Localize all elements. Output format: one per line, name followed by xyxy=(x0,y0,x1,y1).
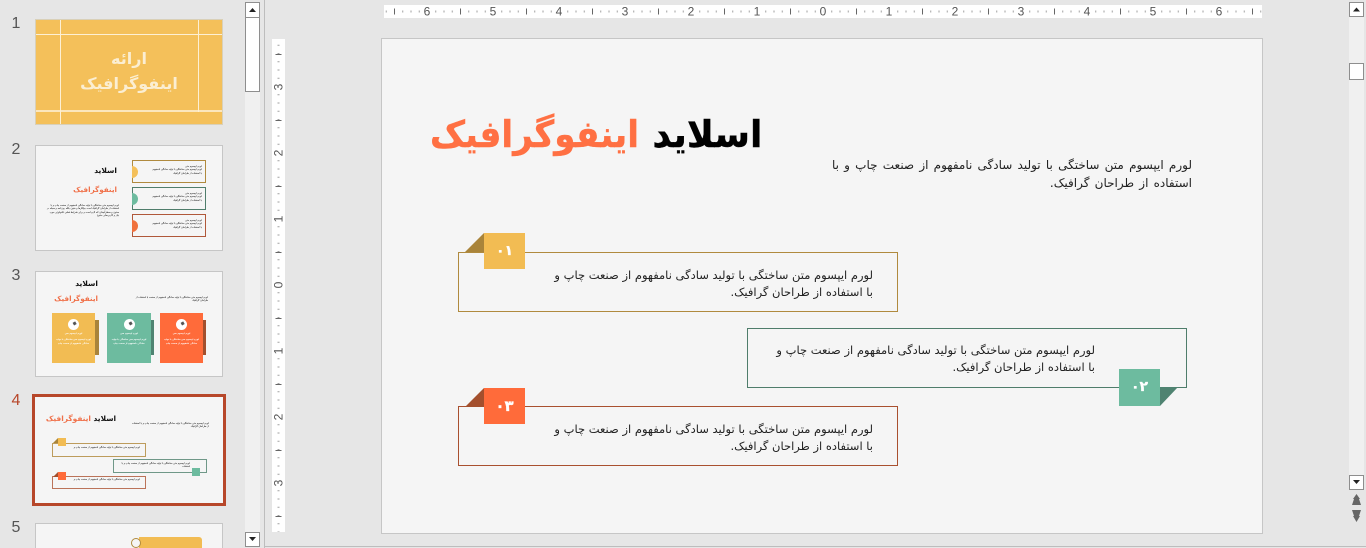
thumbnail 1: title slide: ارائه xyxy=(111,49,147,68)
horizontal ruler: 1 xyxy=(754,4,761,18)
vertical ruler xyxy=(272,39,286,532)
text 03: لورم ایپسوم متن ساختگی با تولید سادگی نامفهوم از صنعت چاپ و xyxy=(554,422,873,436)
thumbnail 4: selected current slide: اسلاید اینفوگرافیک xyxy=(46,414,116,423)
text 01: لورم ایپسوم متن ساختگی با تولید سادگی نامفهوم از صنعت چاپ و xyxy=(554,268,873,282)
vertical ruler: 3 xyxy=(272,479,286,486)
thumbnail 2: three stacked boxes: لورم ایپسوم متن ساختگی با تولید سادگی نامفهوم از صنعت چاپ و با استفاده از طراحان گرافیک است چاپگرها و متون بلکه روزنامه و مجله در ستون و سطرآنچنان که لازم است و برای شرایط فعلی تکنولوژی مورد نیاز و کاربردهای متنوع xyxy=(47,204,119,217)
text 03 xyxy=(554,422,873,453)
horizontal ruler xyxy=(384,4,1262,18)
thumbnail 2: three stacked boxes: با استفاده از طراحان گرافیک xyxy=(173,199,202,202)
thumbnail 2: three stacked boxes: لورم ایپسوم متن xyxy=(185,165,202,168)
panel: item 01 xyxy=(458,233,898,312)
horizontal ruler: 3 xyxy=(622,4,629,18)
number tab 02 xyxy=(1119,369,1160,406)
thumbnail 4: selected current slide: لورم ایپسوم متن ساختگی با تولید سادگی نامفهوم از صنعت چاپ و با استفاده از طراحان گرافیک xyxy=(132,422,209,428)
horizontal ruler: 5 xyxy=(1150,4,1157,18)
thumbnail 1: title slide xyxy=(35,19,223,125)
thumbnail 2: three stacked boxes: لورم ایپسوم متن ساختگی با تولید سادگی نامفهوم xyxy=(152,168,202,171)
vertical ruler: 2 xyxy=(272,149,286,156)
horizontal ruler: 5 xyxy=(490,4,497,18)
horizontal ruler: 2 xyxy=(952,4,959,18)
number tab 03: ۰۳ xyxy=(495,397,514,415)
thumbnail 4: selected current slide xyxy=(32,394,226,506)
fold triangle 03 xyxy=(466,388,484,406)
number tab 03 xyxy=(484,388,525,424)
thumbnail 2: three stacked boxes: لورم ایپسوم متن ساختگی با تولید سادگی نامفهوم xyxy=(152,195,202,198)
horizontal ruler: 3 xyxy=(1018,4,1025,18)
slide number 2: 2 xyxy=(12,141,20,158)
text 02: لورم ایپسوم متن ساختگی با تولید سادگی نامفهوم از صنعت چاپ و xyxy=(776,342,1095,356)
thumbnail 4: selected current slide: لورم ایپسوم متن ساختگی با تولید سادگی نامفهوم از صنعت چاپ و xyxy=(74,446,140,449)
title xyxy=(430,113,762,156)
thumbnail 2: three stacked boxes: با استفاده از طراحان گرافیک xyxy=(173,172,202,175)
thumbnail 3: three colored cards: لورم ایپسوم متن ساختگی با تولید سادگی نامفهوم از صنعت چاپ xyxy=(164,339,199,345)
scrollbar: main slide xyxy=(1349,2,1364,522)
vertical ruler: 3 xyxy=(272,83,286,90)
thumbnail 2: three stacked boxes: با استفاده از طراحان گرافیک xyxy=(173,226,202,229)
thumbnail 3: three colored cards xyxy=(35,271,223,377)
thumbnail 3: three colored cards: لورم ایپسوم متن xyxy=(173,333,190,335)
vertical ruler: 1 xyxy=(272,347,286,354)
number tab 01 xyxy=(484,233,525,269)
intro text block xyxy=(832,158,1192,190)
scrollbar: thumbnail pane xyxy=(245,2,260,547)
horizontal ruler: 4 xyxy=(1084,4,1091,18)
text 01 xyxy=(554,268,873,299)
vertical ruler: 2 xyxy=(272,413,286,420)
text 01: با استفاده از طراحان گرافیک. xyxy=(730,285,873,299)
thumbnail 3: three colored cards: لورم ایپسوم متن ساختگی با تولید سادگی نامفهوم از صنعت چاپ xyxy=(112,339,146,345)
number tab 01: ۰۱ xyxy=(496,243,513,259)
horizontal ruler: 6 xyxy=(424,4,431,18)
text 02 xyxy=(776,342,1095,374)
box outline 02 xyxy=(747,328,1187,388)
title: اسلاید xyxy=(652,113,762,156)
vertical ruler: 0 xyxy=(272,281,286,288)
thumbnail 2: three stacked boxes: لورم ایپسوم متن ساختگی با تولید سادگی نامفهوم xyxy=(152,222,202,225)
thumbnail 4: selected current slide: لورم ایپسوم متن ساختگی با تولید سادگی نامفهوم از صنعت چاپ و xyxy=(74,478,140,481)
thumbnail 3: three colored cards: اسلاید xyxy=(75,279,98,288)
horizontal ruler: 2 xyxy=(688,4,695,18)
vertical ruler: 1 xyxy=(272,215,286,222)
fold triangle 01 xyxy=(465,233,484,252)
main slide canvas xyxy=(381,38,1263,534)
thumbnail 4: selected current slide: لورم ایپسوم متن ساختگی با تولید سادگی نامفهوم از صنعت چاپ و با استفاده xyxy=(122,462,190,468)
fold triangle 02 xyxy=(1160,388,1177,406)
horizontal ruler: 4 xyxy=(556,4,563,18)
thumbnail 1: title slide: اینفوگرافیک xyxy=(80,74,178,93)
slide number 5: 5 xyxy=(12,519,20,536)
thumbnail 3: three colored cards: لورم ایپسوم متن ساختگی با تولید سادگی نامفهوم از صنعت با استفاده از طراحان گرافیک xyxy=(136,296,208,302)
box outline 03 xyxy=(458,406,898,466)
thumbnail 5: partly visible slide xyxy=(35,523,223,548)
intro text block: استفاده از طراحان گرافیک. xyxy=(1050,176,1192,190)
thumbnail 3: three colored cards: لورم ایپسوم متن xyxy=(65,333,82,335)
thumbnail 2: three stacked boxes: لورم ایپسوم متن xyxy=(185,192,202,195)
slide number 4: 4 xyxy=(12,392,20,409)
thumbnail 2: three stacked boxes: اسلاید xyxy=(94,166,117,175)
horizontal ruler: 0 xyxy=(820,4,827,18)
box outline 01 xyxy=(458,252,898,312)
panel: item 03 xyxy=(458,388,898,466)
horizontal ruler: 6 xyxy=(1216,4,1223,18)
thumbnail 3: three colored cards: اینفوگرافیک xyxy=(54,294,98,303)
horizontal ruler: 1 xyxy=(886,4,893,18)
text 02: با استفاده از طراحان گرافیک. xyxy=(952,360,1095,374)
slide number 1: 1 xyxy=(12,15,20,32)
thumbnail 2: three stacked boxes xyxy=(35,145,223,251)
thumbnail 3: three colored cards: لورم ایپسوم متن ساختگی با تولید سادگی نامفهوم از صنعت چاپ xyxy=(56,339,91,345)
text 03: با استفاده از طراحان گرافیک. xyxy=(730,439,873,453)
intro text block: لورم ایپسوم متن ساختگی با تولید سادگی نامفهوم از صنعت چاپ و با xyxy=(832,158,1192,172)
number tab 02: ۰۲ xyxy=(1131,379,1148,395)
thumbnail 2: three stacked boxes: اینفوگرافیک xyxy=(73,185,117,194)
slide number 3: 3 xyxy=(12,267,20,284)
panel: item 02 xyxy=(747,328,1187,406)
thumbnail 2: three stacked boxes: لورم ایپسوم متن xyxy=(185,219,202,222)
thumbnail 3: three colored cards: لورم ایپسوم متن xyxy=(120,333,138,335)
title: اینفوگرافیک xyxy=(430,113,639,156)
